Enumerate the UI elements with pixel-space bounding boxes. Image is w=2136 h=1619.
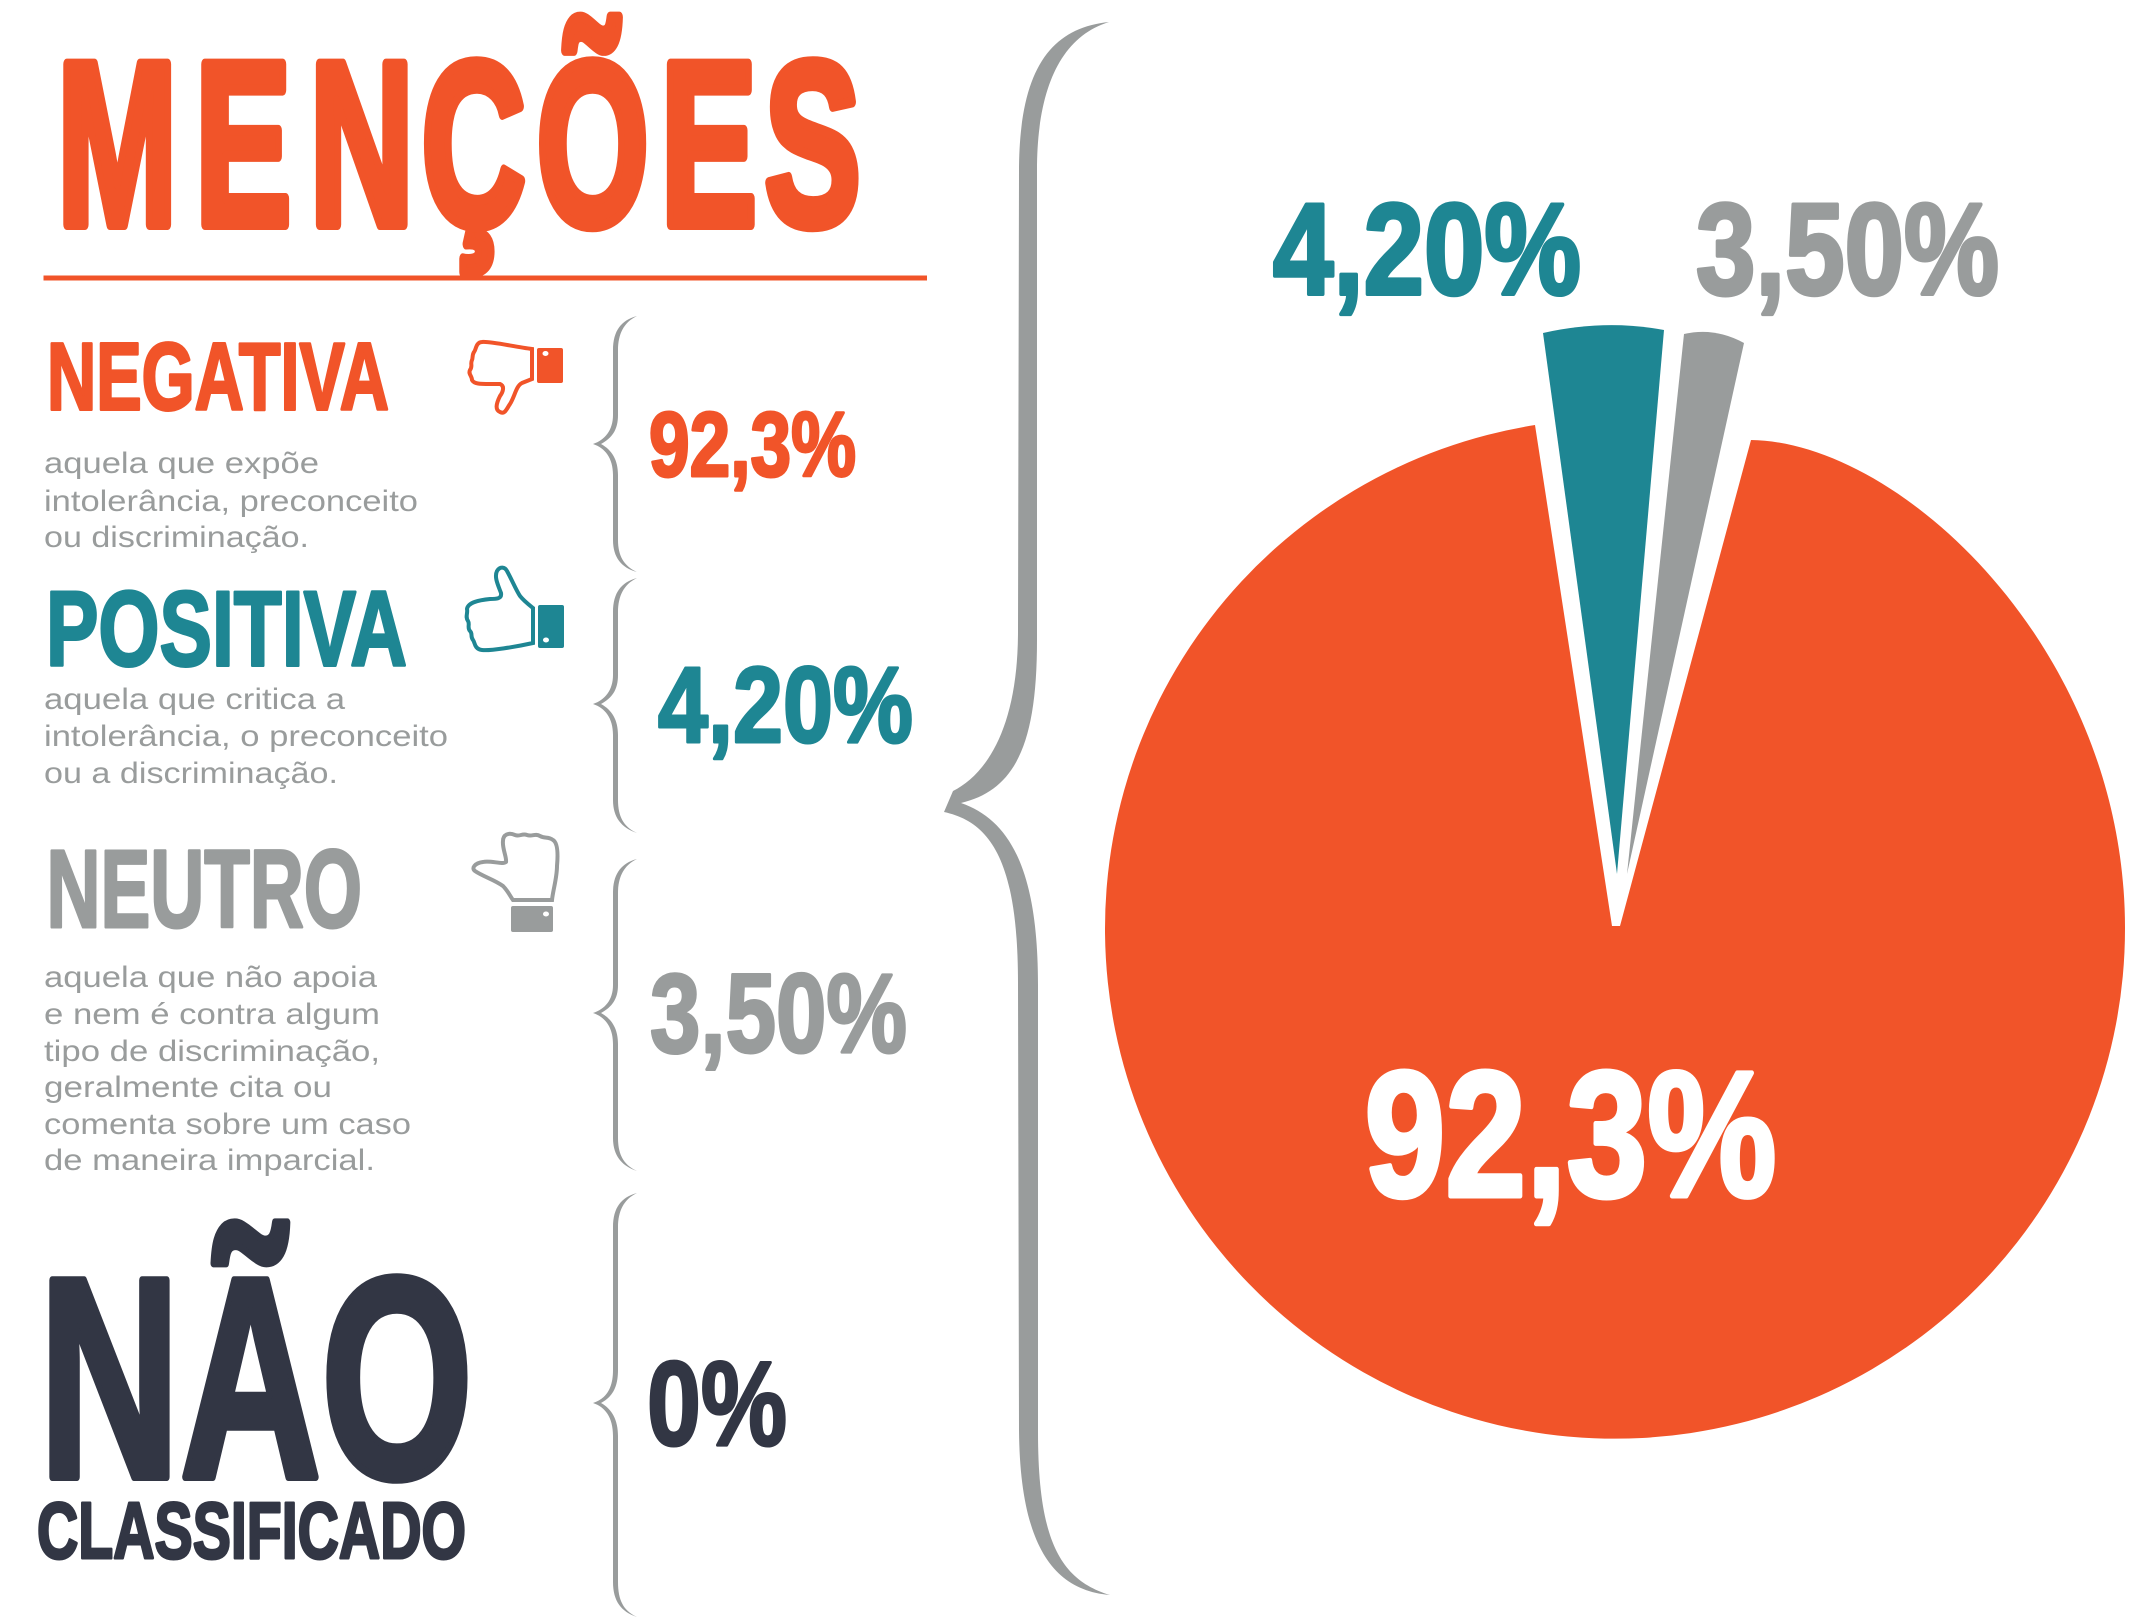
pie chart <box>1105 325 2125 1439</box>
description: neutro: de maneira imparcial. <box>44 1144 375 1177</box>
description: positiva: ou a discriminação. <box>44 757 338 790</box>
big brace <box>944 22 1110 1595</box>
pie label: neutro: 3,50% <box>1696 176 1999 322</box>
description: negativa <box>44 447 418 554</box>
panel: positiva <box>44 568 913 833</box>
panel: neutro <box>44 828 907 1177</box>
value: negativa: 92,3% <box>649 394 856 496</box>
title rule <box>44 276 927 280</box>
slice: negativa <box>1105 425 2125 1439</box>
description: negativa: ou discriminação. <box>44 521 309 554</box>
value: neutro: 3,50% <box>650 951 907 1076</box>
pie label: positiva: 4,20% <box>1273 176 1581 322</box>
description: neutro <box>44 961 411 1177</box>
description: neutro: e nem é contra algum <box>44 998 380 1031</box>
brace: neutro <box>593 859 637 1171</box>
pie label: negativa: 92,3% <box>1364 1034 1776 1234</box>
description: positiva: aquela que critica a <box>44 683 345 716</box>
brace: negativa <box>593 316 637 572</box>
panel: não classificado <box>37 1193 787 1617</box>
heading: neutro: NEUTRO <box>46 828 362 951</box>
description: neutro: geralmente cita ou <box>44 1071 332 1104</box>
description: negativa: aquela que expõe <box>44 447 319 480</box>
slice: positiva <box>1543 325 1664 874</box>
value: positiva: 4,20% <box>658 644 913 765</box>
icon: thumbs up <box>467 568 564 650</box>
description: positiva: intolerância, o preconceito <box>44 720 448 753</box>
heading: não: NÃO <box>39 1218 473 1538</box>
icon: thumbs down <box>469 342 563 413</box>
brace: não classificado <box>593 1193 637 1617</box>
value: não classificado: 0% <box>647 1337 787 1471</box>
heading: positiva: POSITIVA <box>46 568 407 688</box>
slice: neutro <box>1627 332 1744 874</box>
brace: positiva <box>593 578 637 833</box>
heading: classificado: CLASSIFICADO <box>37 1486 466 1575</box>
heading: negativa: NEGATIVA <box>47 324 389 430</box>
description: positiva <box>44 683 448 790</box>
panel: negativa <box>44 316 856 572</box>
description: neutro: comenta sobre um caso <box>44 1108 411 1141</box>
description: neutro: tipo de discriminação, <box>44 1035 380 1068</box>
title: MENÇÕES <box>57 15 861 275</box>
description: negativa: intolerância, preconceito <box>44 485 418 518</box>
description: neutro: aquela que não apoia <box>44 961 377 994</box>
icon: neutral hand <box>473 834 558 932</box>
